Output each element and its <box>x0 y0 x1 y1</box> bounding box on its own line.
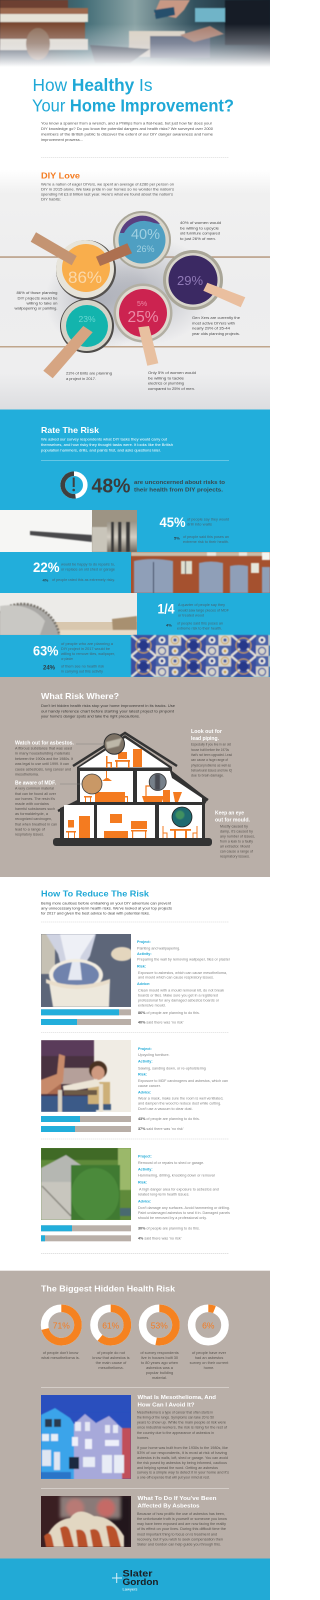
photo: circular saw <box>0 593 137 635</box>
Rate The Risk text: We asked our survey respondents what DIY tasks they would carry out <box>41 438 168 442</box>
stat: 45% drill into walls: 5% <box>174 536 180 541</box>
stat: 45% drill into walls: of people said this poses an <box>183 535 229 539</box>
stat: 1/4 saw large pieces: of people said this poses an <box>177 621 223 625</box>
annotation: mould: out for mould. <box>215 818 251 824</box>
project 1 text: 86% of people are planning to do this. <box>138 1011 200 1015</box>
heading: What To Do: Affected By Asbestos <box>138 1504 200 1510</box>
callout: 23% of Brits: 23% of Brits are planning <box>66 372 112 376</box>
callout: Gen Xers: most active DIYers with <box>192 321 235 325</box>
bar: 40% no risk <box>41 1019 131 1025</box>
stat: 45% drill into walls <box>160 515 229 544</box>
intro text: You know a spanner from a wrench, and a Phillips from a flat-head, but just how far does your <box>41 122 213 126</box>
annotation: asbestos: was legal to use until 1999. It can <box>15 762 69 766</box>
illustration: house cross-section <box>53 733 212 846</box>
risk spot: lead pipe circle <box>149 774 166 790</box>
project 2 text: cause cancer. <box>138 1084 161 1088</box>
project 3 text: Risk: <box>138 1180 147 1184</box>
project 3 text: Advice: <box>138 1200 151 1204</box>
project 1 text: Clean mould with a mould removal kit, do not break <box>138 988 224 992</box>
project 3 text: Paint undamaged asbestos to seal it in. Damaged panels <box>138 1211 230 1215</box>
project 2 text: 43% of people are planning to do this. <box>138 1117 200 1121</box>
What Risk Where text: Don't let hidden health risks stop your home improvement in its tracks. Use <box>41 703 175 708</box>
callout: only 5% of women: compared to 25% of men. <box>148 387 195 391</box>
annotation: MDF: as formaldehyde, a <box>15 812 49 816</box>
project 3 text: related long-term health issues. <box>138 1192 189 1196</box>
Rate The Risk text <box>41 438 173 452</box>
mesothelioma text: asbestos in its walls, loft, shed or garage. You can avoid <box>137 1456 228 1460</box>
stat: 22% repair shed: would be happy to do repairs to, <box>61 563 115 567</box>
bar: 30% planning <box>41 1225 131 1231</box>
donut: 61% <box>94 1308 127 1342</box>
project 3 text: Removal of or repairs to shed or garage. <box>138 1161 204 1165</box>
project 1 text <box>137 940 231 1025</box>
callout: only 5% of women: be willing to tackle <box>148 376 184 380</box>
heading: What Is Mesothelioma <box>138 1395 217 1409</box>
annotation: mould: air extractor. Mould <box>220 844 250 848</box>
mesothelioma text: If your home was built from the 1930s to the 1980s, like <box>137 1446 228 1450</box>
callout: only 5% of women: electrics or plumbing <box>148 381 184 385</box>
asbestos affected text <box>137 1512 227 1546</box>
footer: Slater and Gordon logo <box>0 1558 270 1600</box>
callout: 86% of those planning: wallpapering or painting. <box>14 306 58 310</box>
project 2 text: Exposure to MDF carcinogens and asbestos, which can <box>138 1079 228 1083</box>
project 2 text: and dampen the wood to reduce dust while cutting. <box>138 1101 221 1105</box>
donut: 71%: 71% <box>53 1320 70 1330</box>
callout: 40% of women: 40% of women would <box>180 221 221 225</box>
photo: gloved hands with asbestos <box>41 1496 131 1547</box>
callout: 40% of women: be willing to upcycle <box>180 226 219 230</box>
What Risk Where text: our handy reference chart before starting your latest project to pinpoint <box>41 708 175 713</box>
stat: 1/4 saw large pieces: or treated wood <box>178 614 204 618</box>
mesothelioma text <box>137 1411 229 1480</box>
stat text: their health from DIY projects. <box>134 488 224 494</box>
stat: 1/4 saw large pieces: would saw large pieces of MDF <box>178 608 229 612</box>
mesothelioma text: Mesothelioma is a type of cancer that often starts in <box>137 1411 213 1415</box>
project 3 text: Hammering, drilling, knocking down or removal <box>138 1174 215 1178</box>
annotation: asbestos: Watch out for asbestos. <box>15 740 75 746</box>
mesothelioma text: and helping spread the word. Getting an asbestos <box>137 1466 218 1470</box>
stat: 63% remove tiles: in carrying out this activity <box>61 669 103 673</box>
annotation: MDF: lead to a range of <box>15 827 46 831</box>
panel: DIY Love paint tins <box>0 170 270 410</box>
annotation: mould: Mostly caused by <box>220 824 248 828</box>
project 1 text: Painting and wallpapering. <box>137 946 180 950</box>
caption: 71% <box>41 1350 80 1360</box>
donut: 53% <box>143 1308 176 1342</box>
orange furniture <box>66 749 197 838</box>
Rate The Risk text: population hammers, drills, and paints first, and asks questions later. <box>41 448 161 452</box>
logo wordmark <box>122 1568 159 1587</box>
intro text: improvement prowess... <box>41 138 83 142</box>
caption: 53%: asbestos was a <box>146 1365 174 1370</box>
mesothelioma text: homes. <box>137 1436 149 1440</box>
project 1 text: Advice: <box>137 982 150 986</box>
project 3 text: A high danger area for exposure to asbestos and <box>139 1187 219 1191</box>
paint tin: blue 40%: 40% <box>131 227 160 243</box>
stat: 63% remove tiles: DIY project in 2017 would be <box>61 647 110 651</box>
donut: 6%: 6% <box>202 1320 215 1330</box>
annotation: asbestos: in many housebuilding materials <box>15 751 70 755</box>
project 2 text: Advice: <box>138 1090 151 1094</box>
paint tin: blue 40% <box>113 211 171 269</box>
project 2 text: Upcycling furniture. <box>138 1053 170 1057</box>
stat: 22% repair shed: 4% <box>42 578 49 582</box>
project 1 text: boards or tiles. Make sure you get in a registered <box>138 993 218 997</box>
project 2 text: Wear a mask, make sure the room is well ventilated, <box>138 1096 223 1100</box>
caption: 6% <box>190 1350 229 1370</box>
heading: DIY Love: DIY Love <box>41 171 80 181</box>
DIY Love text: spending hit £3.8 billion last year. Here's what we found about the nation's <box>41 192 173 196</box>
annotation: lead piping: house built before the 1970s <box>191 748 229 752</box>
annotation: MDF: respiratory issues. <box>15 832 44 836</box>
annotation: lead piping <box>191 729 232 777</box>
caption: 71%: what mesothelioma is. <box>41 1355 80 1360</box>
project 1 text: Activity: <box>137 952 152 956</box>
photo: ivy covered shed <box>41 1148 131 1222</box>
intro text: members of the British public to discover the extent of our DIY danger awareness and home <box>41 132 213 136</box>
photo: woman with chair <box>41 1040 131 1112</box>
callout: 40% of women: old furniture compared <box>180 231 220 235</box>
donut: 71% <box>45 1308 78 1342</box>
stat: 63% remove tiles: 24% <box>43 666 56 672</box>
asbestos affected text: may have been exposed and are now facing the reality <box>137 1522 226 1526</box>
caption: 6%: home. <box>204 1365 214 1370</box>
icon: plus <box>112 1573 122 1583</box>
stat: 63% remove tiles: or plaster <box>61 657 74 661</box>
stat: 63% remove tiles: willing to remove tiles, wallpaper, <box>61 652 115 656</box>
mesothelioma text: a one-off expense that will put your mind at rest. <box>137 1476 210 1480</box>
heading: The Biggest Hidden Health Risk: The Biggest Hidden Health Risk <box>41 1284 175 1294</box>
paint tin: orange 86%: 86% <box>68 268 102 287</box>
project 2 text: Don't use a vacuum to clear dust. <box>138 1107 193 1111</box>
project 1 text: and mould which can cause respiratory issues. <box>138 976 214 980</box>
annotation: asbestos: A fibrous substance that was used <box>15 746 72 750</box>
logo wordmark: Gordon <box>122 1577 159 1587</box>
bar: 37% no risk <box>41 1126 131 1132</box>
photo: brick garages <box>131 552 270 593</box>
caption: 61%: mesothelioma. <box>98 1365 124 1370</box>
project 2 text: Project: <box>138 1047 152 1051</box>
annotation: MDF: Be aware of MDF. <box>15 780 57 786</box>
project 3 text <box>138 1155 230 1240</box>
project 3 text: 4% said there was 'no risk' <box>138 1236 182 1240</box>
project 1 text: Risk: <box>137 964 146 968</box>
annotation: lead piping: lead piping. <box>191 736 220 742</box>
panel: Rate The Risk <box>0 410 270 680</box>
photo: patterned tiles <box>131 635 270 677</box>
asbestos affected text: recovery, but if you wish to seek compensation then <box>137 1537 223 1541</box>
risk spot: mould circle <box>172 807 192 827</box>
annotation: MDF: that can be found all over <box>15 792 57 796</box>
annotation: MDF: that when breathed in can <box>15 822 57 826</box>
annotation: asbestos: between the 1900s and the 1980s. It <box>15 757 74 761</box>
stat: 22% repair shed: or replace an old shed or garage <box>61 568 115 572</box>
callout: 23% of Brits <box>66 372 112 381</box>
heading: What To Do <box>138 1496 217 1510</box>
How To Reduce text: for 2017 and given the best advice to deal with potential risks. <box>41 910 150 915</box>
paint tin: red 25%: 25% <box>127 309 159 326</box>
annotation: MDF <box>15 780 57 836</box>
mesothelioma text: 53% of our respondents, it is most at risk of having <box>137 1451 227 1455</box>
stat: 1/4 saw large pieces <box>158 602 229 630</box>
bar: 86% planning <box>41 1009 131 1015</box>
logo tagline: Lawyers <box>122 1587 137 1592</box>
asbestos affected text: the unfortunate truth is yourself or someone you know <box>137 1517 227 1521</box>
caption: 53%: material. <box>152 1375 167 1380</box>
stat: 63% remove tiles <box>33 642 115 673</box>
callout: 86% of those planning <box>14 291 58 310</box>
title <box>32 75 234 116</box>
project 2 text: Sawing, sanding down, or re-upholstering <box>138 1066 206 1070</box>
project 1 text: Preparing the wall by removing wallpaper, tiles or plaster <box>137 957 231 961</box>
stat: 63% remove tiles: of them see no health risk <box>61 665 104 669</box>
project 3 text: Project: <box>138 1155 152 1159</box>
DIY Love text <box>41 182 174 201</box>
annotation: mould <box>215 810 255 858</box>
panel: What Risk Where <box>0 677 270 877</box>
paint tin: blue 40%: 26% <box>136 244 155 254</box>
callout: Gen Xers <box>192 316 240 336</box>
heading: What Is Mesothelioma: What Is Mesothelioma, And <box>138 1395 217 1401</box>
annotation: mould: respiratory issues. <box>220 854 250 858</box>
mesothelioma text: the country due to the appearance of asbestos in <box>137 1431 214 1435</box>
annotation: MDF: made with contains <box>15 802 49 806</box>
stat text: are unconcerned about risks to <box>134 480 226 486</box>
callout: 86% of those planning: 86% of those planning <box>16 291 58 295</box>
project 2 text: Activity: <box>138 1060 153 1064</box>
annotation: mould: can cause a range of <box>220 849 254 853</box>
stat: 45% drill into walls: 45% <box>160 515 186 530</box>
Rate The Risk text: themselves, and how risky they thought tasks were. It looks like the British <box>41 443 173 447</box>
project 3 text: should be removed by a professional only. <box>138 1216 207 1220</box>
paint sticks <box>31 232 245 378</box>
stat: 63% remove tiles: 63% <box>33 643 58 658</box>
annotation: asbestos <box>15 740 75 776</box>
paint tin: orange 86% <box>56 240 116 300</box>
project 2 text: 37% said there was 'no risk' <box>138 1127 184 1131</box>
annotation: MDF: recognized carcinogen, <box>15 817 52 821</box>
DIY Love text: DIY in 2015 alone. We take pride in our homes so no wonder the nation's <box>41 187 174 191</box>
caption: 61% <box>92 1350 130 1370</box>
bar: 4% no risk <box>41 1235 131 1241</box>
annotation: mould: from a leak to a faulty <box>220 839 253 843</box>
caption: 53%: live in houses built 30 <box>141 1355 179 1360</box>
stat: 22% repair shed: of people rated this as extremely risky. <box>52 578 115 582</box>
mesothelioma text: years to show up. While the main people at risk were <box>137 1421 226 1425</box>
paint tin: purple 29%: 29% <box>177 273 203 288</box>
callout: 23% of Brits: a project in 2017. <box>66 377 96 381</box>
stat: 22% repair shed: 22% <box>33 560 60 575</box>
callout: 86% of those planning: willing to take on <box>26 301 58 305</box>
caption: 53%: popular building <box>146 1370 173 1375</box>
paint tin: teal 23%: 23% <box>78 314 96 324</box>
annotation: lead piping: behavioural issues and low IQ <box>191 768 232 772</box>
annotation: asbestos: cause asbestosis, lung cancer and <box>15 767 71 771</box>
mesothelioma text: survey is a simple way to detect it in your home and it's <box>137 1471 229 1475</box>
stat: 48%: 48% <box>92 476 131 498</box>
intro text: DIY knowledge go? Do you know the potential dangers and health risks? We surveyed over 2000 <box>41 127 213 131</box>
caption: 71%: of people don't know <box>43 1350 78 1355</box>
stat: 45% drill into walls: drill into walls <box>187 523 212 527</box>
paint tin: red 25%: 5% <box>137 301 147 308</box>
intro text <box>41 122 213 142</box>
mesothelioma text: once industrial workers, the risk is rising for the rest of <box>137 1426 228 1430</box>
project 1 text: 40% said there was 'no risk' <box>138 1021 184 1025</box>
project 3 text: 30% of people are planning to do this. <box>138 1227 200 1231</box>
caption: 61%: of people do not <box>97 1350 126 1355</box>
heading: Rate The Risk: Rate The Risk <box>41 425 99 435</box>
paint tin: purple 29% <box>163 250 223 310</box>
heading: How To Reduce The Risk: How To Reduce The Risk <box>41 889 149 899</box>
annotation: MDF: A very common material <box>15 787 54 791</box>
annotation: lead piping: Look out for <box>191 729 222 735</box>
callout: Gen Xers: nearly 29% of 35-44 <box>192 327 230 331</box>
project 1 text: professional for any damaged asbestos boards or <box>138 998 220 1002</box>
project 1 text: Exposure to asbestos, which can cause mesothelioma, <box>138 971 227 975</box>
annotation: mould: damp, it's caused by <box>220 829 253 833</box>
annotation: lead piping: can cause a huge range of <box>191 758 229 762</box>
annotation: mould: any number of issues, <box>220 834 255 838</box>
title: Your Home Improvement? <box>32 96 234 116</box>
annotation: lead piping: due to brain damage. <box>191 773 224 777</box>
hero photo: workbench <box>0 0 270 67</box>
caption: 53%: to 80 years ago when <box>141 1360 178 1365</box>
annotation: asbestos: mesothelioma. <box>15 772 39 776</box>
project 2 text <box>138 1047 228 1131</box>
annotation: lead piping: that's not been upgraded. Lead <box>191 753 232 757</box>
What Risk Where text <box>41 703 175 718</box>
DIY Love text: We're a nation of eager DIYers, we spent an average of £280 per person on <box>41 182 174 186</box>
callout: Gen Xers: Gen Xers are currently the <box>192 316 240 320</box>
mesothelioma text: the risk posed by asbestos by being informed, cautious <box>137 1461 227 1465</box>
caption: 6%: survey on their current <box>190 1360 229 1365</box>
callout: 40% of women: to just 26% of men. <box>180 237 216 241</box>
project 2 text: Risk: <box>138 1073 147 1077</box>
project 1: painting and wallpapering <box>41 934 231 1025</box>
DIY Love text: DIY habits: <box>41 197 61 201</box>
heading: What To Do: What To Do If You've Been <box>138 1496 217 1502</box>
callout: 40% of women <box>180 221 221 241</box>
icon: 48% donut with exclamation <box>63 474 85 496</box>
bar: 43% planning <box>41 1116 131 1122</box>
callout: only 5% of women <box>148 371 196 391</box>
mesothelioma text: the lining of the lungs. Symptoms can take 20 to 50 <box>137 1416 214 1420</box>
asbestos affected text: Slater and Gordon can help guide you through this. <box>137 1542 221 1546</box>
How To Reduce text <box>41 900 172 915</box>
annotation: lead piping: physical problems as well as <box>191 763 231 767</box>
caption: 53% <box>140 1350 179 1380</box>
paint tin: teal 23% <box>60 299 114 353</box>
stat: 45% drill into walls: of people say they would <box>187 518 229 522</box>
stat text <box>134 480 226 494</box>
callout: Gen Xers: year olds planning projects. <box>192 332 240 336</box>
logo wordmark: Slater <box>122 1568 153 1578</box>
project 3: shed repairs <box>41 1148 230 1241</box>
photo: row of painted houses <box>41 1395 131 1480</box>
photo: pouring paint <box>41 934 133 1007</box>
callout: 86% of those planning: DIY projects would be <box>18 296 58 300</box>
project 2: upcycling furniture <box>41 1040 228 1132</box>
title: How Healthy Is <box>32 75 153 95</box>
asbestos affected text: Because of how prolific the use of asbestos has been, <box>137 1512 225 1516</box>
asbestos affected text: of its effect on your lives. During this difficult time the <box>137 1527 226 1531</box>
risk spot: MDF circle <box>82 774 102 794</box>
heading: What Is Mesothelioma: How Can I Avoid It? <box>138 1403 195 1409</box>
caption: 53%: of survey respondents <box>140 1350 179 1355</box>
What Risk Where text: your home's danger spots and take the right precautions. <box>41 713 140 718</box>
project 1 text: Project: <box>137 940 151 944</box>
How To Reduce text: any unnecessary long-term health risks. We've looked at your top projects <box>41 905 172 910</box>
caption: 61%: the main cause of <box>96 1360 127 1365</box>
stat: 63% remove tiles: of people who are planning a <box>61 642 113 646</box>
annotation: MDF: harmful substances such <box>15 807 55 811</box>
panel: The Biggest Hidden Health Risk <box>0 1271 270 1558</box>
stat: 1/4 saw large pieces: A quarter of people say they <box>178 603 225 607</box>
caption: 6%: of people have ever <box>192 1350 227 1355</box>
stat: 1/4 saw large pieces: 4% <box>166 623 172 628</box>
caption: 6%: had an asbestos <box>195 1355 223 1360</box>
stat: 1/4 saw large pieces: extreme risk to their health. <box>177 626 222 630</box>
caption: 61%: know that asbestos is <box>92 1355 130 1360</box>
annotation: lead piping: Especially if you live in an old <box>191 742 231 746</box>
annotation: MDF: our homes. The resin it's <box>15 797 55 801</box>
donut: 61%: 61% <box>102 1320 120 1330</box>
stat: 22% repair shed <box>33 560 115 582</box>
project 1 text: extensive mould. <box>138 1003 166 1007</box>
paint tin: red 25% <box>114 284 172 342</box>
stat: 45% drill into walls: extreme risk to their health. <box>183 540 229 544</box>
asbestos affected text: most important thing to focus on is treatment and <box>137 1532 217 1536</box>
annotation: mould: Keep an eye <box>215 810 244 816</box>
project 3 text: Don't damage any surfaces. Avoid hammering or drilling. <box>138 1206 230 1210</box>
donut: 6% <box>192 1308 225 1342</box>
stat: 1/4 saw large pieces: 1/4 <box>158 602 175 616</box>
How To Reduce text: Being more cautious before embarking on your DIY adventure can prevent <box>41 900 172 905</box>
callout: only 5% of women: Only 5% of women would <box>148 371 196 375</box>
risk spot: asbestos circle <box>104 734 125 754</box>
donut: 53%: 53% <box>151 1320 168 1330</box>
photo: drill <box>0 510 137 552</box>
heading: What Risk Where?: What Risk Where? <box>41 691 119 701</box>
project 3 text: Activity: <box>138 1168 153 1172</box>
